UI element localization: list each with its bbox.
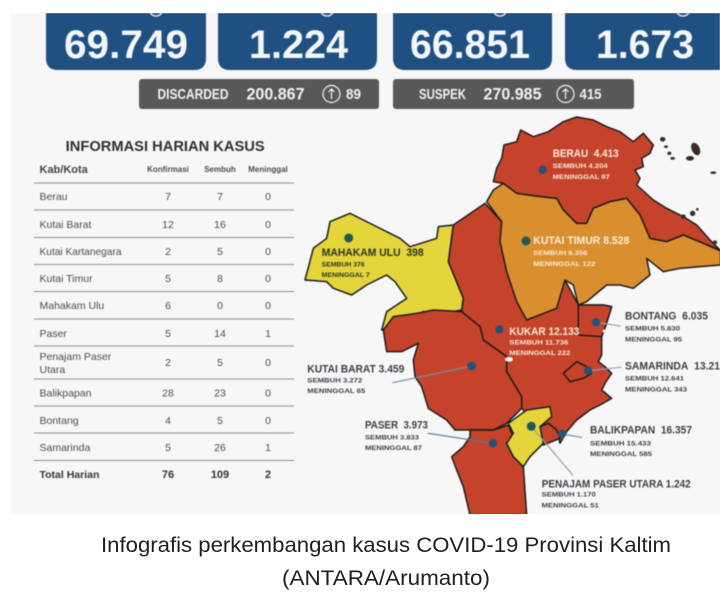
- label: Mahakam Ulu: SEMBUH 376: [322, 262, 365, 268]
- row: Kutai Kartanegara: Kutai Kartanegara: [40, 246, 122, 258]
- pill: suspek: SUSPEK: [419, 87, 466, 103]
- row: Kutai Timur: [40, 274, 272, 283]
- lake and bay details: [505, 330, 607, 362]
- table: daily cases: [34, 139, 294, 481]
- pill: suspek: 415: [580, 87, 602, 103]
- label: Kukar: KUKAR 12.133: [509, 326, 579, 338]
- label: Kutai Barat: SEMBUH 3.272: [307, 378, 363, 384]
- row: Samarinda: 5: [165, 442, 171, 454]
- row: Samarinda: 26: [214, 442, 226, 454]
- label: Balikpapan: SEMBUH 15.433: [590, 440, 651, 447]
- label: Kutai Timur: SEMBUH 8.356: [533, 250, 588, 257]
- region: Bontang: [578, 305, 612, 337]
- row: Penajam Paser Utara: 2: [165, 357, 171, 369]
- label: Penajam Paser Utara: PENAJAM PASER UTARA 1.242: [542, 478, 691, 490]
- row: Kutai Timur: 0: [265, 273, 271, 285]
- region: Kutai Barat: [383, 310, 522, 430]
- region: Berau: [493, 117, 720, 250]
- region: Paser: [452, 425, 527, 515]
- label: Mahakam Ulu: MENINGGAL 7: [322, 272, 370, 279]
- row: total: [39, 470, 272, 479]
- card: recovered: [392, 13, 553, 71]
- label: Balikpapan: MENINGGAL 585: [590, 451, 652, 458]
- label: Kutai Timur: KUTAI TIMUR 8.528: [533, 235, 629, 247]
- label: Balikpapan: BALIKPAPAN 16.357: [590, 425, 692, 437]
- label: Paser: [365, 419, 428, 452]
- card: deaths: [564, 13, 720, 71]
- row: Kutai Timur: 5: [165, 273, 171, 285]
- row: Kutai Kartanegara: 0: [265, 246, 271, 258]
- label: Kukar: MENINGGAL 222: [509, 350, 571, 357]
- row: Balikpapan: 23: [214, 388, 226, 400]
- label: Kutai Barat: MENINGGAL 65: [307, 388, 366, 395]
- row: Balikpapan: [40, 388, 272, 399]
- row: Paser: 1: [265, 328, 271, 340]
- label: Penajam Paser Utara: SEMBUH 1.170: [542, 492, 596, 499]
- pill: discarded: 200.867: [246, 84, 304, 104]
- pill: discarded: 89: [346, 87, 361, 103]
- card: active: 1.224: [249, 23, 349, 67]
- row: Kutai Barat: Kutai Barat: [40, 219, 92, 231]
- row: total: Total Harian: [40, 469, 99, 481]
- label: Kutai Barat: KUTAI BARAT 3.459: [307, 364, 404, 376]
- row: total: 2: [265, 469, 271, 481]
- row: total: 109: [211, 469, 229, 481]
- row: Balikpapan: Balikpapan: [40, 388, 92, 400]
- table header: Meninggal: [248, 165, 288, 174]
- pill: discarded: [139, 79, 379, 109]
- label: Kutai Timur: [533, 235, 629, 268]
- label: Kukar: SEMBUH 11.736: [509, 340, 569, 346]
- caption: [101, 534, 671, 590]
- region: Kukar: [448, 203, 612, 443]
- label: Penajam Paser Utara: [542, 478, 691, 510]
- row: Paser: [40, 329, 271, 338]
- region: Samarinda: [563, 362, 592, 382]
- row: Paser: 14: [214, 328, 226, 340]
- row: Kutai Barat: 0: [265, 219, 271, 231]
- map: East Kalimantan: [305, 117, 720, 515]
- card: confirmed: [45, 13, 207, 71]
- label: Paser: SEMBUH 3.833: [365, 434, 419, 441]
- row: Berau: 7: [217, 191, 223, 203]
- row: Berau: 7: [165, 191, 171, 203]
- label: Penajam Paser Utara: MENINGGAL 51: [542, 502, 599, 510]
- label: Mahakam Ulu: [322, 247, 424, 279]
- row: Kutai Kartanegara: 2: [165, 246, 171, 258]
- table header: Sembuh: [204, 165, 236, 174]
- label: Berau: MENINGGAL 97: [553, 174, 610, 181]
- label: Berau: SEMBUH 4.204: [553, 163, 608, 170]
- row: Berau: Berau: [40, 191, 68, 203]
- row: Samarinda: 1: [265, 442, 271, 454]
- leader lines: [393, 322, 621, 475]
- row: Mahakam Ulu: [40, 301, 272, 310]
- row: Kutai Kartanegara: 5: [217, 246, 223, 258]
- pill: suspek: 270.985: [484, 84, 542, 104]
- row: Penajam Paser Utara: 0: [265, 357, 271, 369]
- row: Mahakam Ulu: 0: [265, 300, 271, 312]
- islands: [660, 137, 717, 244]
- row: Kutai Barat: [40, 220, 272, 229]
- row: Samarinda: [40, 443, 271, 452]
- pill: suspek: [393, 79, 634, 109]
- label: Mahakam Ulu: MAHAKAM ULU 398: [322, 247, 424, 259]
- region: Kutai Timur: [487, 183, 720, 320]
- label: Kukar: [509, 326, 579, 357]
- caption: Infografis perkembangan kasus COVID-19 Provinsi Kaltim: [101, 534, 671, 557]
- label: Paser: MENINGGAL 87: [365, 445, 422, 452]
- card: deaths: 1.673: [596, 23, 694, 67]
- row: Samarinda: Samarinda: [40, 442, 90, 454]
- label: Balikpapan: [590, 425, 692, 458]
- table header: [40, 164, 288, 174]
- table header: Konfirmasi: [147, 165, 189, 174]
- row: Bontang: 0: [265, 415, 271, 427]
- row: Penajam Paser Utara: 5: [217, 357, 223, 369]
- row: Berau: 0: [265, 191, 271, 203]
- row: Bontang: [40, 415, 271, 427]
- label: Paser: PASER 3.973: [365, 419, 428, 431]
- region: Mahakam Ulu: [305, 213, 463, 330]
- label: Samarinda: MENINGGAL 343: [625, 387, 687, 394]
- row: Berau: [40, 192, 272, 201]
- region: Balikpapan: [540, 423, 560, 445]
- row: Bontang: Bontang: [40, 415, 79, 427]
- stat cards: [45, 13, 720, 71]
- row: Kutai Timur: 8: [217, 273, 223, 285]
- row: Kutai Timur: Kutai Timur: [40, 273, 93, 285]
- row: Mahakam Ulu: 6: [165, 300, 171, 312]
- row: Mahakam Ulu: 0: [217, 300, 223, 312]
- row: Kutai Kartanegara: [40, 246, 271, 258]
- caption: (ANTARA/Arumanto): [282, 567, 490, 590]
- row: Mahakam Ulu: Mahakam Ulu: [40, 300, 104, 312]
- map dots: [344, 166, 600, 447]
- row: Penajam Paser Utara: Utara: [40, 364, 65, 376]
- table title: INFORMASI HARIAN KASUS: [66, 139, 265, 155]
- table header: Kab/Kota: [40, 164, 89, 176]
- row: Balikpapan: 0: [265, 388, 271, 400]
- row: Bontang: 4: [165, 415, 171, 427]
- row: Paser: 5: [165, 328, 171, 340]
- row: total: 76: [162, 469, 174, 481]
- row: Penajam Paser Utara: Penajam Paser: [40, 351, 112, 363]
- label: Kutai Barat: [307, 364, 404, 395]
- row: Balikpapan: 28: [162, 388, 174, 400]
- label: Samarinda: SEMBUH 12.641: [625, 376, 684, 383]
- card: confirmed: 69.749: [64, 23, 188, 67]
- row: Kutai Barat: 16: [214, 219, 226, 231]
- row: Penajam Paser Utara: [40, 352, 272, 374]
- label: Bontang: BONTANG 6.035: [625, 310, 708, 322]
- card: recovered: 66.851: [410, 23, 530, 67]
- pill: discarded: DISCARDED: [158, 87, 228, 103]
- label: Kutai Timur: MENINGGAL 122: [533, 261, 596, 268]
- label: Bontang: SEMBUH 5.830: [625, 326, 680, 333]
- label: Bontang: MENINGGAL 95: [625, 337, 682, 344]
- row: Paser: Paser: [40, 328, 67, 340]
- row: Kutai Barat: 12: [162, 219, 174, 231]
- row: Bontang: 5: [217, 415, 223, 427]
- card: active: [217, 13, 378, 71]
- label: Berau: BERAU 4.413: [553, 148, 619, 160]
- label: Bontang: [625, 310, 708, 344]
- label: Berau: [553, 148, 619, 181]
- region: Penajam Paser Utara: [507, 407, 552, 467]
- label: Samarinda: [625, 360, 720, 394]
